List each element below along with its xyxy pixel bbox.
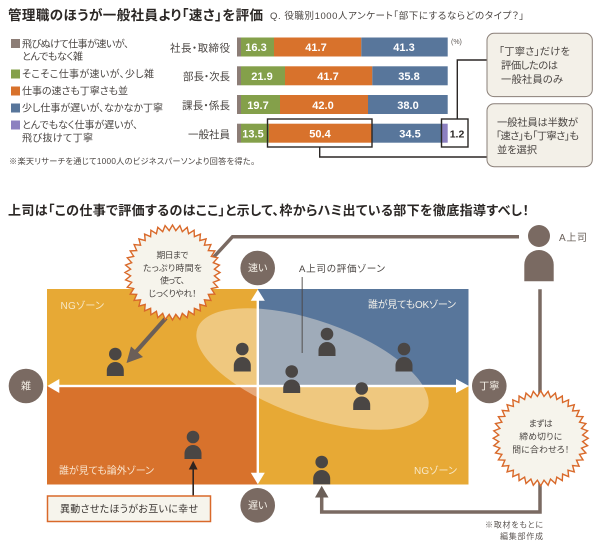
bar row: 社長・取締役: 社長・取締役	[170, 42, 230, 54]
connector: boss to first burst	[212, 237, 519, 259]
bar row: 一般社員	[188, 124, 448, 143]
burst callout: 期日まで: じっくりやれ！	[148, 288, 196, 298]
note box: 異動: 異動させたほうがお互いに幸せ	[60, 502, 198, 516]
axis label: 速い	[240, 251, 275, 285]
bar row: 課長・係長	[182, 95, 448, 114]
legend: 仕事の速さも丁寧さも並	[22, 84, 128, 98]
icon: subordinate lower centre	[353, 382, 370, 410]
footnote: editorial credit: ※取材をもとに	[485, 520, 543, 530]
bar row: 課長・係長: 課長・係長	[182, 99, 230, 112]
title: survey heading: 管理職のほうが一般社員より「速さ」を評価	[8, 7, 263, 23]
zone label: OK: 誰が見てもOKゾーン	[368, 298, 457, 311]
bar row: 部長・次長: 35.8	[398, 71, 420, 83]
highlight box: 1.2 with connector: 1.2	[450, 128, 464, 140]
legend: 飛びぬけて仕事が速いが、	[22, 38, 129, 50]
axis label: 丁寧	[472, 369, 507, 403]
axis label: 丁寧: 丁寧	[479, 380, 499, 392]
evaluation zone label with leader	[299, 263, 385, 353]
arrow: note box to subordinate	[189, 461, 198, 496]
arrow: burst to NG subordinate	[126, 318, 166, 363]
axis label: 遅い	[240, 488, 275, 523]
icon: subordinate top centre	[318, 328, 336, 356]
icon: boss A	[524, 225, 554, 281]
bar row: 課長・係長: 38.0	[397, 100, 419, 112]
bar row: 課長・係長: 19.7	[247, 100, 269, 112]
icon: subordinate NG top left	[107, 348, 124, 376]
icon: subordinate centre	[283, 365, 300, 393]
callout: 半数が並: 一般社員は半数が	[497, 116, 579, 129]
connector: boss to bottom subordinate	[315, 289, 540, 512]
burst callout: 期日まで: 期日まで	[156, 250, 189, 260]
A上司の評価ゾーン ellipse	[181, 283, 444, 455]
zone label: NG top left: NGゾーン	[60, 300, 105, 312]
bar row: 社長・取締役: 16.3	[245, 42, 267, 54]
percent unit: (%)	[451, 39, 462, 46]
title: matrix heading: 上司は「この仕事で評価するのはここ」と示して、枠からハミ出ている部下を徹底指導すべし！	[8, 203, 529, 218]
matrix quadrants	[47, 289, 468, 484]
legend: 少し仕事が遅いが、なかなか丁寧	[22, 102, 163, 114]
stacked bar chart	[170, 38, 462, 143]
axis label: 雑: 雑	[21, 380, 31, 392]
axis label: 速い: 速い	[248, 262, 268, 274]
bar row: 部長・次長	[183, 66, 448, 85]
bar row: 一般社員: 13.5	[242, 128, 264, 140]
burst callout: 期日まで: たっぷり時間を	[143, 263, 202, 273]
icon: subordinate top right	[396, 343, 412, 372]
axes with arrows	[47, 290, 469, 484]
legend: 飛び抜けて丁寧	[22, 132, 93, 144]
bar row: 社長・取締役: 41.7	[305, 42, 327, 54]
evaluation zone label with leader: A上司の評価ゾーン	[299, 263, 385, 275]
legend: とんでもなく雑	[22, 50, 83, 63]
icon: subordinate centre left	[234, 343, 251, 372]
legend: そこそこ仕事が速いが、少し雑	[22, 68, 154, 80]
boss label: A上司	[559, 232, 587, 244]
callout: 丁寧さ	[487, 33, 592, 97]
callout: 丁寧さ: 一般社員のみ	[501, 73, 563, 86]
legend: とんでもなく仕事が遅いが、	[22, 118, 138, 132]
bar row: 部長・次長: 部長・次長	[183, 70, 230, 83]
icon: subordinate out of zone	[184, 431, 202, 459]
callout: 丁寧さ: 「丁寧さ」だけを	[499, 45, 570, 58]
bar row: 部長・次長: 41.7	[317, 71, 339, 83]
burst callout: まずは	[493, 391, 588, 486]
burst callout: 期日まで	[125, 225, 220, 320]
icon: subordinate NG bottom right	[313, 456, 330, 484]
highlight box: 1.2 with connector	[442, 60, 487, 147]
footnote: survey source: ※楽天リサーチを通じて1000人のビジネスパーソンより回答を得た。	[9, 156, 255, 166]
footnote: editorial credit	[485, 520, 543, 541]
bar row: 一般社員: 50.4	[309, 128, 332, 140]
legend	[11, 38, 163, 144]
bar row: 課長・係長: 42.0	[312, 100, 334, 112]
axis label: 雑	[9, 369, 43, 403]
zone label: NG bottom right: NGゾーン	[414, 465, 458, 477]
burst callout: まずは: まずは	[529, 418, 553, 428]
burst callout: 期日まで: 使って、	[160, 274, 185, 286]
burst callout: まずは: 締め切りに	[519, 430, 562, 441]
callout: 半数が並: 並を選択	[497, 144, 538, 156]
callout: 丁寧さ: 評価したのは	[501, 59, 558, 72]
footnote: editorial credit: 編集部作成	[500, 531, 543, 541]
burst callout: まずは: 間に合わせろ！	[512, 443, 569, 454]
callout: 半数が並: 「速さ」も「丁寧さ」も	[496, 130, 579, 142]
bar row: 部長・次長: 21.9	[251, 71, 273, 83]
callout: 半数が並	[487, 104, 592, 167]
survey question: Q. 役職別1000人アンケート「部下にするならどのタイプ？」	[270, 10, 524, 22]
axis label: 遅い: 遅い	[248, 500, 268, 512]
bar row: 一般社員: 一般社員	[188, 128, 230, 141]
bar row: 社長・取締役: 41.3	[393, 42, 415, 54]
zone label: out of the question: 誰が見ても論外ゾーン	[59, 464, 155, 477]
bar row: 社長・取締役	[170, 38, 448, 56]
highlight box: 50.4 with connector	[268, 119, 487, 157]
note box: 異動	[48, 496, 210, 522]
bar row: 一般社員: 34.5	[399, 128, 421, 140]
